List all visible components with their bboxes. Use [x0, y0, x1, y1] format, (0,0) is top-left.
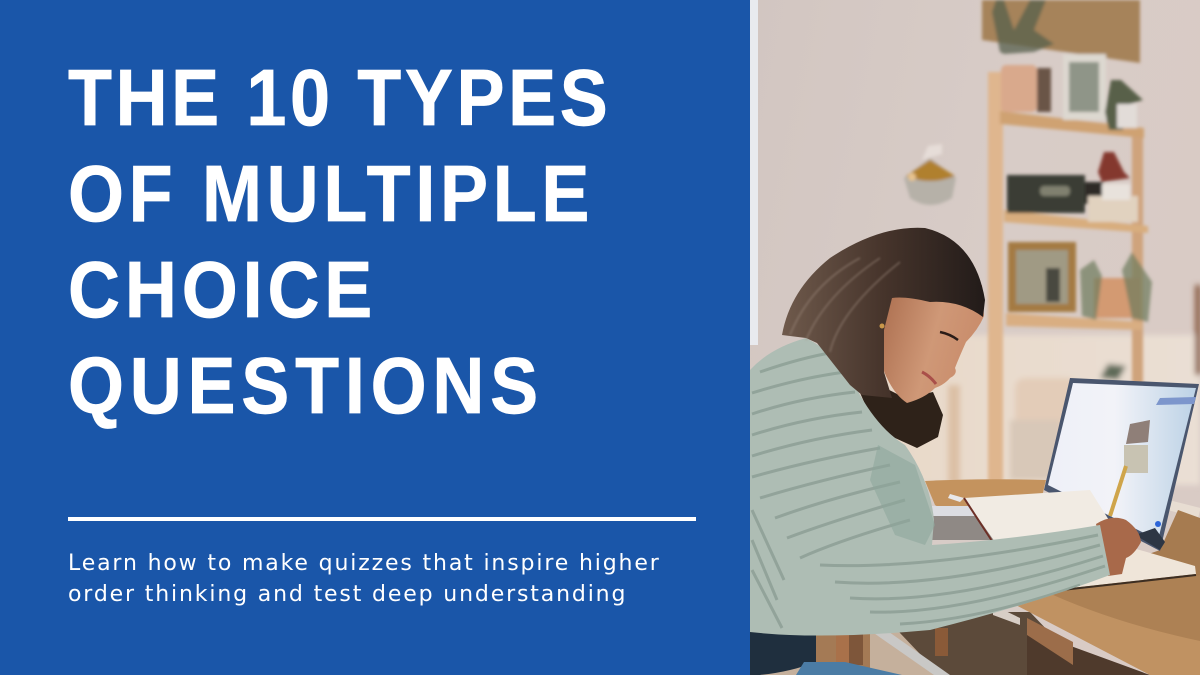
title: QUESTIONS [68, 341, 544, 430]
title: OF MULTIPLE [68, 149, 594, 238]
potted plant [1094, 278, 1140, 318]
hair [782, 228, 985, 398]
bench rail [858, 620, 950, 675]
eye and lips [922, 332, 958, 384]
notebook [964, 490, 1196, 590]
title: THE 10 TYPES [68, 53, 611, 142]
photo: student writing at a laptop [750, 0, 1200, 675]
divider rule [68, 517, 696, 521]
title [68, 53, 611, 430]
hair lower strands [850, 370, 943, 448]
panel: blue title background [0, 0, 750, 675]
subtitle text: Learn how to make quizzes that inspire higher [68, 551, 661, 576]
laptop [1044, 378, 1199, 551]
earring [880, 324, 884, 328]
picture frame [1063, 54, 1106, 120]
plant and pot [992, 0, 1054, 54]
wall [750, 0, 1200, 675]
floor and rug [750, 612, 1150, 675]
face [878, 285, 984, 403]
chair and table legs [836, 616, 849, 666]
desk [925, 479, 1200, 675]
blurred lower background [860, 285, 1200, 485]
framed print [1008, 242, 1076, 312]
sweater [750, 338, 1110, 636]
subtitle text [68, 551, 661, 606]
hand [1096, 518, 1141, 576]
subtitle text: order thinking and test deep understanding [68, 582, 627, 606]
shelving unit [982, 0, 1152, 482]
jeans [750, 628, 902, 675]
pencil [1110, 466, 1126, 516]
storage box [1007, 175, 1085, 213]
title: CHOICE [68, 245, 377, 334]
wall lamp [904, 144, 956, 205]
